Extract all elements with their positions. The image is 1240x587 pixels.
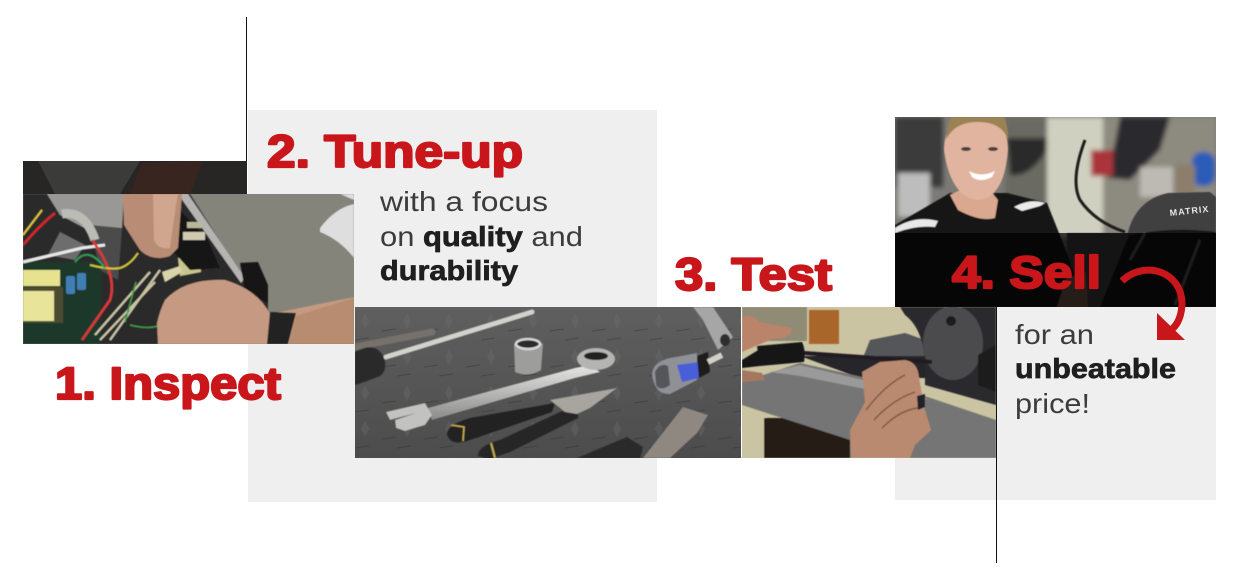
- text block: with a focus on quality and durability: [379, 186, 583, 286]
- panel: sell background: [895, 307, 1216, 500]
- photo: technician testing with screwdriver: [742, 306, 996, 458]
- dark band over photo: [23, 161, 247, 194]
- photo: tools on rubber mat: [355, 307, 741, 459]
- heading: 2. Tune-up: 2. Tune-up: [267, 126, 523, 177]
- heading: 4. Sell: 4. Sell: [952, 247, 1101, 298]
- photo: hands inspecting wiring: [23, 161, 354, 344]
- text block: with a focus on quality and durability: with a focus: [379, 186, 548, 217]
- text block: for an unbeatable price!: [1015, 319, 1176, 419]
- vertical rule: left: [246, 17, 247, 194]
- label on console: MATRIX: [1169, 204, 1210, 218]
- text block: for an unbeatable price!: price!: [1015, 388, 1090, 419]
- panel: tune-up background: [248, 110, 657, 502]
- photo: salesman with Matrix equipment: [895, 117, 1216, 307]
- text block: for an unbeatable price!: unbeatable: [1015, 353, 1176, 384]
- text block: for an unbeatable price!: for an: [1015, 319, 1094, 350]
- heading: 1. Inspect: 1. Inspect: [55, 358, 281, 409]
- text block: with a focus on quality and durability: durability: [380, 255, 518, 286]
- text block: with a focus on quality and durability: on quality and: [380, 221, 583, 252]
- dark band over photo: [895, 233, 1216, 307]
- arrow: curved red arrow: [1122, 270, 1185, 340]
- vertical rule: right: [996, 307, 997, 563]
- heading: 3. Test: 3. Test: [675, 249, 832, 300]
